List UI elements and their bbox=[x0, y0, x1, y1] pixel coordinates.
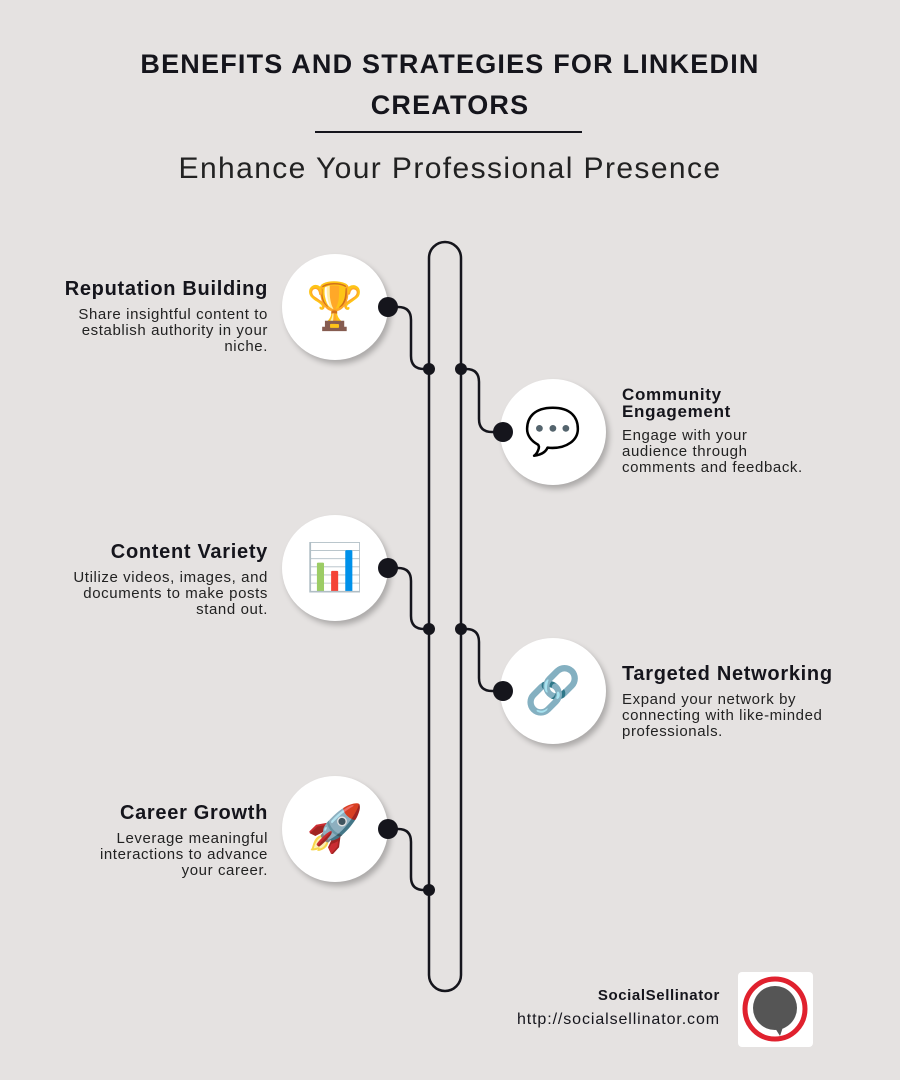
text: reputation building: Reputation Building bbox=[65, 278, 268, 300]
icon: bar chart: 📊 bbox=[306, 541, 364, 595]
icon: link bbox=[500, 638, 606, 744]
icon: speech bubble: 💬 bbox=[524, 405, 582, 459]
title: BENEFITS AND STRATEGIES FOR LINKEDIN CREATORS bbox=[140, 49, 760, 120]
subtitle: Enhance Your Professional Presence bbox=[179, 152, 721, 185]
footer brand: SocialSellinator bbox=[598, 987, 720, 1004]
text: career growth: Leverage meaningful interactions to advance your career. bbox=[100, 830, 268, 879]
text: targeted networking: Targeted Networking bbox=[622, 663, 833, 685]
text: community engagement bbox=[622, 385, 803, 476]
icon: trophy bbox=[282, 254, 388, 360]
text: career growth: Career Growth bbox=[120, 802, 268, 824]
text: community engagement: Engagement bbox=[622, 402, 731, 421]
icon: speech bubble bbox=[500, 379, 606, 485]
footer brand bbox=[517, 987, 720, 1028]
text: content variety: Content Variety bbox=[111, 541, 268, 563]
icon: rocket: 🚀 bbox=[306, 802, 364, 856]
icon: rocket bbox=[282, 776, 388, 882]
text: targeted networking bbox=[622, 663, 833, 740]
title underline bbox=[315, 131, 582, 133]
icon: trophy: 🏆 bbox=[306, 280, 364, 334]
icon: link: 🔗 bbox=[524, 664, 582, 718]
text: community engagement: Engage with your bbox=[622, 427, 748, 444]
logo bbox=[738, 972, 813, 1047]
text: reputation building: Share insightful content to establish authority in your niche. bbox=[78, 306, 268, 355]
text: content variety: Utilize videos, images, and documents to make posts stand out. bbox=[73, 569, 268, 618]
footer brand: http://socialsellinator.com bbox=[517, 1011, 720, 1028]
text: community engagement: Community bbox=[622, 385, 722, 404]
text: targeted networking: Expand your network by connecting with like-minded professionals. bbox=[622, 691, 822, 740]
text: content variety bbox=[73, 541, 268, 618]
text: career growth bbox=[100, 802, 268, 879]
text: community engagement: comments and feedback. bbox=[622, 459, 803, 476]
text: reputation building bbox=[65, 278, 268, 355]
text: community engagement: audience through bbox=[622, 443, 748, 460]
icon: bar chart bbox=[282, 515, 388, 621]
